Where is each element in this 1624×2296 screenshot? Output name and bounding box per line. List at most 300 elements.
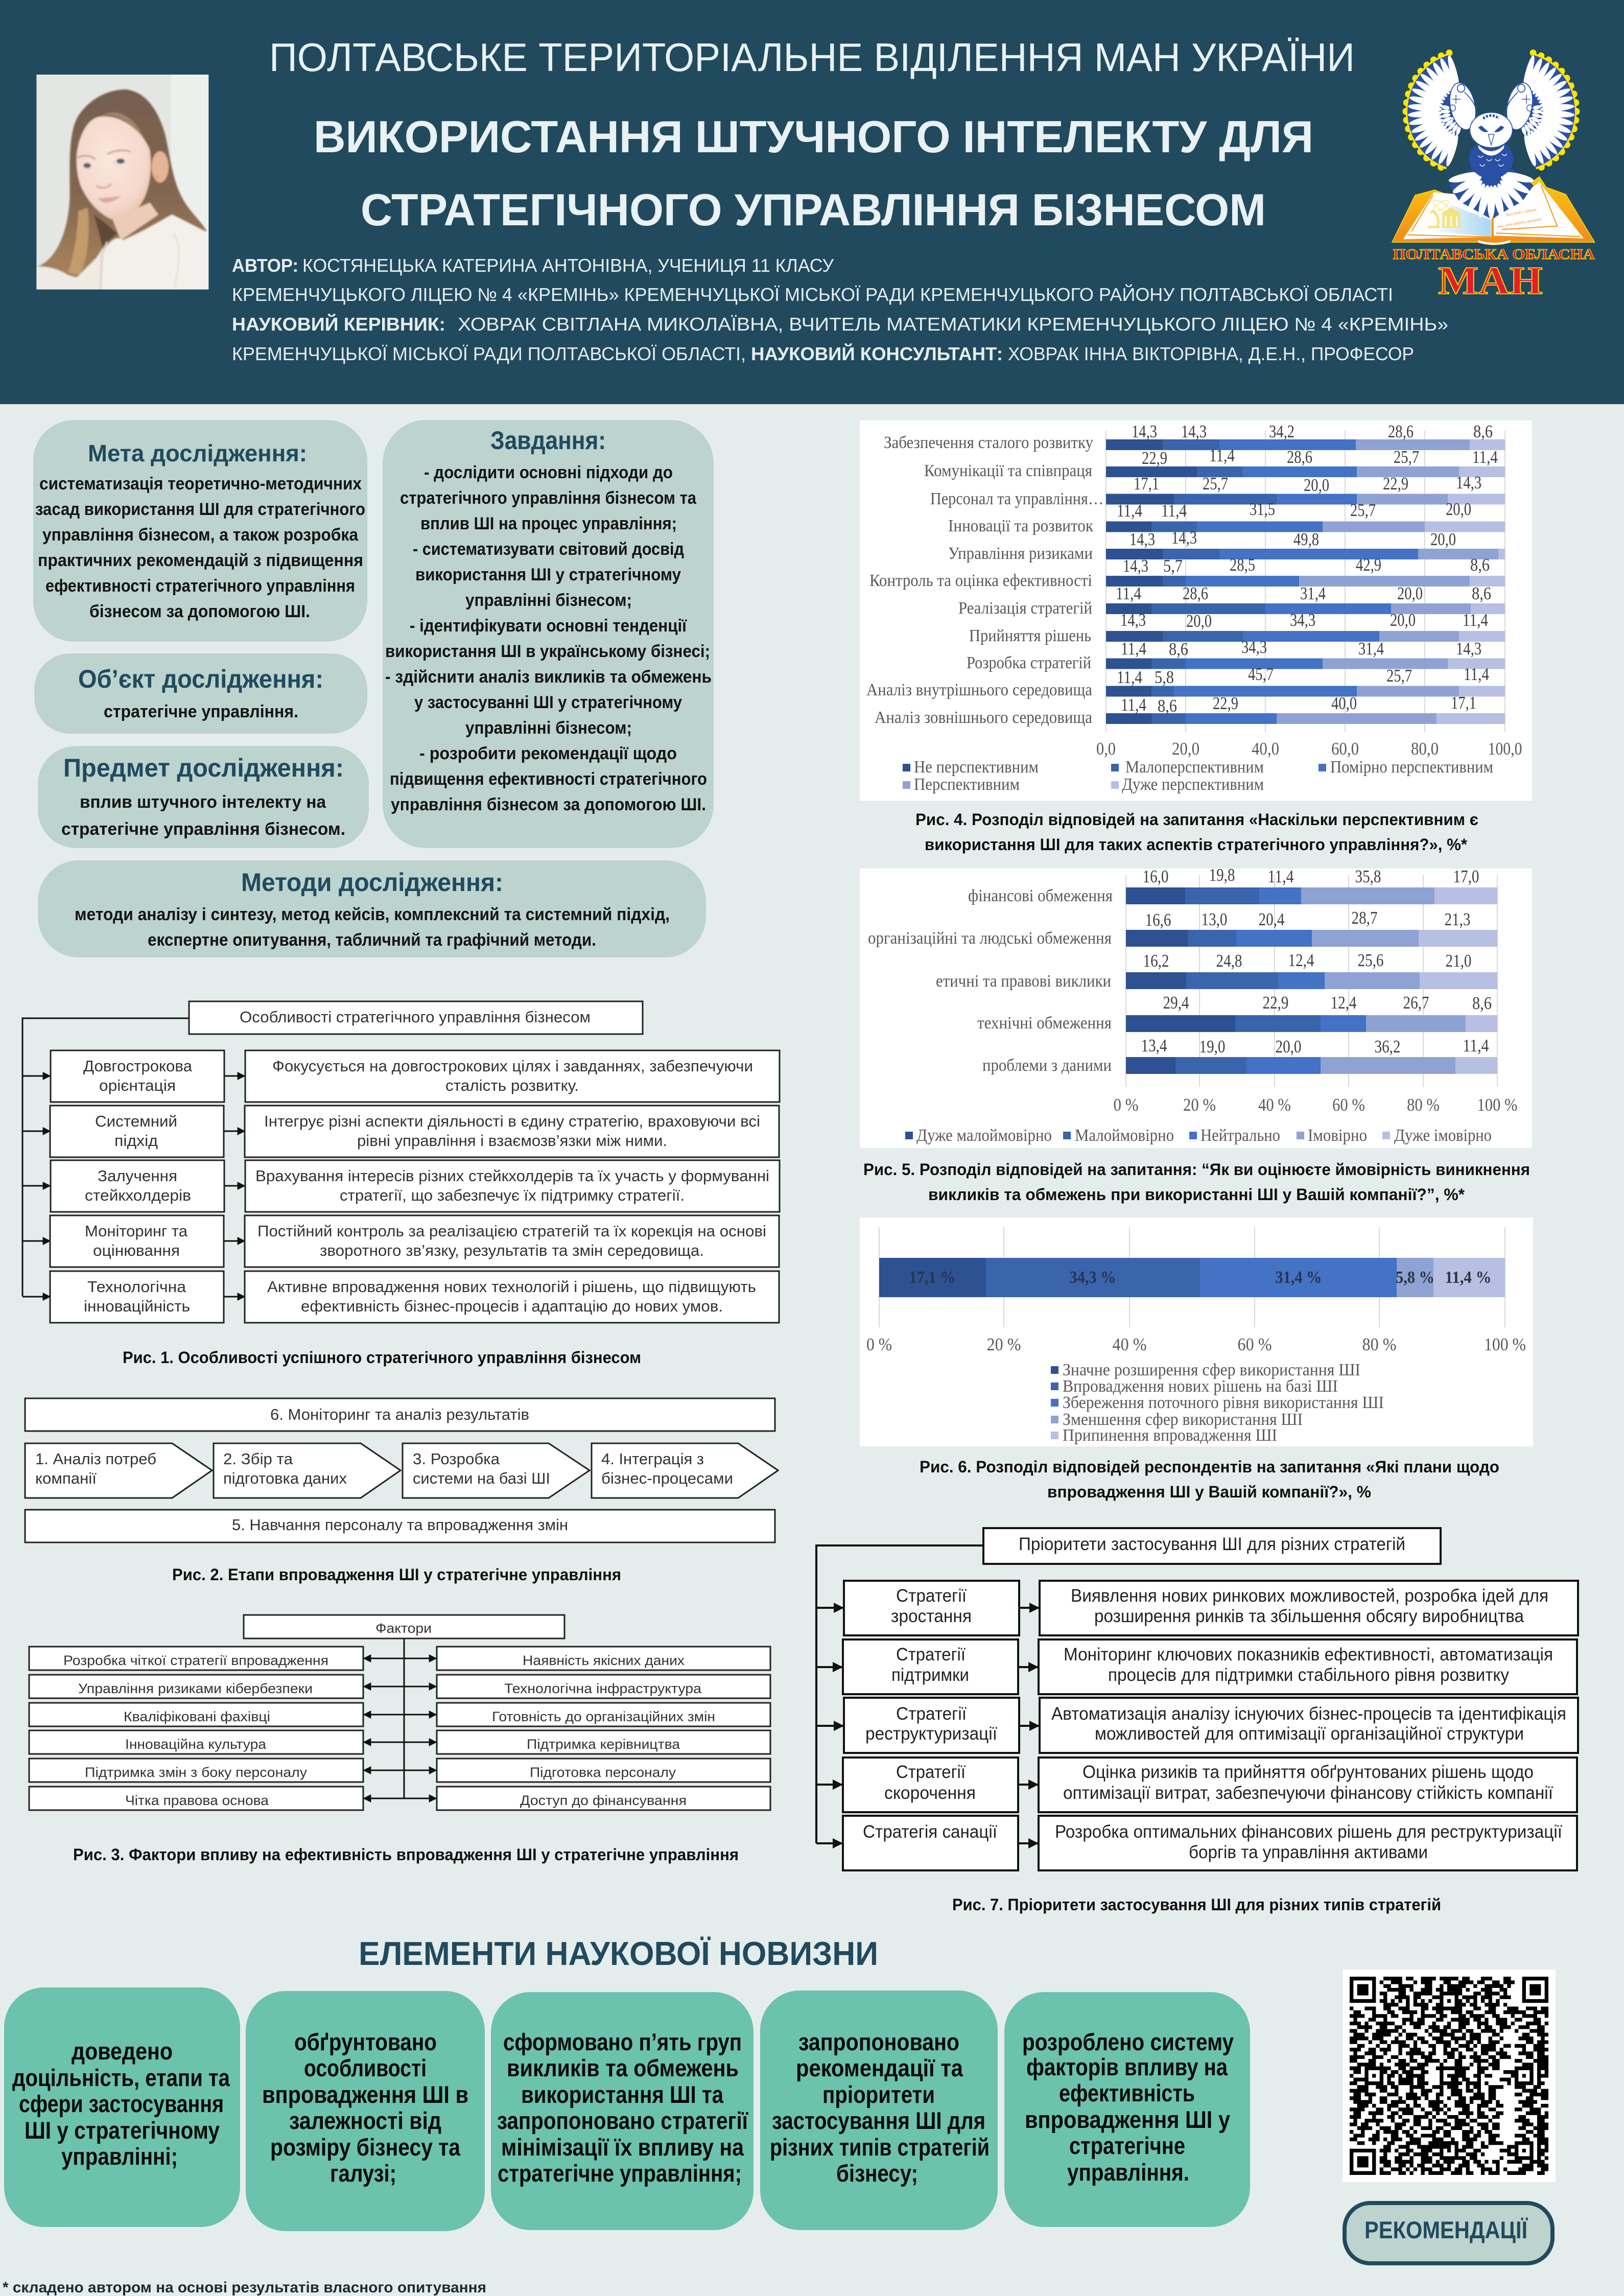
card: novelty 2: розміру бізнесу та [270,2134,461,2161]
panel: research subject [38,746,369,848]
author and supervisors text: КРЕМЕНЧУЦЬКОГО ЛІЦЕЮ № 4 «КРЕМІНЬ» КРЕМЕНЧУЦЬКОЇ МІСЬКОЇ РАДИ КРЕМЕНЧУЦЬКОГО РАЙОНУ ПОЛТАВСЬКОЇ ОБЛАСТІ [232,284,1393,305]
left factor boxes: Розробка чіткої стратегії впровадження [63,1653,328,1668]
value labels: 31,4 % [1275,1268,1322,1287]
text: aim: систематизація теоретично-методичних [39,474,362,494]
card: novelty 5: стратегічне [1069,2132,1185,2159]
stacked bars [1126,887,1497,1074]
value labels: 20,0 [1390,610,1416,630]
category labels [868,886,1113,1075]
caption: figure 4 [915,810,1478,854]
card: novelty 4 [760,1990,998,2230]
value labels: 26,7 [1403,993,1429,1013]
row: support strategies [843,1639,1577,1694]
category labels: Персонал та управління… [930,489,1103,508]
text: object: стратегічне управління. [104,702,298,721]
footnote: * складено автором на основі результатів власного опитування [3,2279,486,2296]
value labels: 34,2 [1269,421,1295,441]
left factor boxes: Інноваційна культура [125,1737,267,1752]
right factor boxes: Готовність до організаційних змін [492,1709,715,1724]
row: support strategies: процесів для підтримки стабільного рівня розвитку [1108,1665,1509,1685]
text: tasks list: - дослідити основні підходи до [424,463,673,482]
card: novelty 2 [246,1991,485,2231]
caption: figure 4: Рис. 4. Розподіл відповідей на запитання «Наскільки перспективним є [915,810,1478,829]
caption: figure 6: впровадження ШІ у Вашій компанії?», % [1047,1483,1371,1501]
card: novelty 4: запропоновано [798,2028,959,2055]
row: growth strategies: Виявлення нових ринкових можливостей, розробка ідей для [1071,1586,1548,1606]
caption: figure 6 [920,1458,1499,1501]
chart: figure 5 stacked bars [860,865,1532,1148]
value labels: 25,7 [1350,500,1376,520]
value labels [909,1268,1492,1287]
open book: хто світ робить кращим! [1496,216,1542,229]
value labels: 14,3 [1123,556,1148,576]
value labels: 42,9 [1356,555,1381,575]
row: support strategies: Моніторинг ключових показників ефективності, автоматизація [1064,1645,1553,1665]
legend [903,758,1493,794]
caption: figure 1: Рис. 1. Особливості успішного стратегічного управління бізнесом [123,1348,641,1367]
value labels: 17,1 [1451,693,1476,713]
category labels [866,433,1103,727]
box: diagram title: Пріоритети застосування ШІ для різних стратегій [1019,1534,1405,1554]
value labels: 11,4 [1209,446,1235,465]
poster title: СТРАТЕГІЧНОГО УПРАВЛІННЯ БІЗНЕСОМ [361,184,1266,235]
row: systems approach: підхід [114,1132,158,1150]
row: stakeholder engagement: Врахування інтересів різних стейкхолдерів та їх участь у формуванні [255,1167,769,1185]
panel: research methods [38,860,706,957]
value labels: 11,4 [1472,447,1498,467]
row: support strategies: Стратегії [896,1645,966,1665]
arrow: stage 1: компанії [35,1469,97,1487]
legend: Збереження поточного рівня використання ШІ [1063,1393,1384,1412]
author and supervisors text: КОСТЯНЕЦЬКА КАТЕРИНА АНТОНІВНА, УЧЕНИЦЯ 11 КЛАСУ [302,255,834,276]
box: diagram title: Особливості стратегічного управління бізнесом [240,1008,591,1026]
right factor boxes: Підтримка керівництва [527,1737,680,1752]
value labels: 14,3 [1181,421,1207,441]
author and supervisors text [232,255,1448,364]
left factor boxes: Підтримка змін з боку персоналу [85,1765,308,1780]
value labels: 19,8 [1209,865,1235,885]
caption: figure 2: Рис. 2. Етапи впровадження ШІ у стратегічне управління [172,1565,621,1584]
value labels: 14,3 [1129,529,1155,549]
row: restructuring strategies: Стратегії [896,1704,967,1724]
value labels: 11,4 [1116,583,1141,603]
panel: tasks [383,420,714,848]
value labels: 25,7 [1394,447,1419,467]
value labels: 21,3 [1445,909,1470,929]
value labels: 12,4 [1288,950,1314,970]
value labels: 17,0 [1453,866,1479,886]
value labels: 20,0 [1397,583,1423,603]
row: monitoring and evaluation: Моніторинг та [85,1222,188,1240]
button: recommendations: РЕКОМЕНДАЦІЇ [1364,2216,1528,2243]
value labels [1141,865,1492,1057]
heading: methods: Методи дослідження: [241,868,503,897]
legend: Дуже малоймовірно [916,1126,1052,1145]
legend: Перспективним [914,775,1020,794]
legend: Імовірно [1308,1126,1367,1145]
card: novelty 4: рекомендації та [796,2054,963,2081]
row: technological innovation: Технологічна [87,1278,186,1296]
value labels: 12,4 [1330,993,1357,1013]
x axis labels: 60,0 [1331,739,1359,759]
value labels: 11,4 % [1445,1268,1492,1287]
value labels: 22,9 [1142,448,1167,468]
value labels: 16,0 [1142,866,1169,886]
value labels: 11,4 [1464,664,1489,684]
value labels: 13,4 [1141,1036,1167,1056]
box: stage 6 [25,1398,775,1431]
owl tail [1448,165,1535,219]
text: tasks list: управлінні бізнесом; [465,591,632,610]
row: long-term orientation: сталість розвитку. [445,1076,579,1094]
value labels: 25,6 [1358,950,1383,970]
logo wording: ПОЛТАВСЬКА ОБЛАСНА: ПОЛТАВСЬКА ОБЛАСНА [1393,247,1595,263]
caption: figure 3: Рис. 3. Фактори впливу на ефективність впровадження ШІ у стратегічне управління [73,1845,739,1864]
value labels: 11,4 [1117,667,1142,687]
x axis labels: 0,0 [1096,739,1116,759]
x axis labels: 80 % [1362,1334,1397,1354]
x axis labels [1096,739,1522,759]
chart: figure 6 single stacked bar [860,1217,1533,1446]
row: technological innovation: Активне впровадження нових технологій і рішень, що підвищують [267,1278,756,1296]
value labels: 19,0 [1199,1037,1225,1057]
row: systems approach: Інтегрує різні аспекти діяльності в єдину стратегію, враховуючи всі [264,1112,760,1130]
category labels: Розробка стратегій [967,653,1091,672]
photo: author portrait [36,75,208,290]
card: novelty 1: сфери застосування [19,2090,224,2117]
row: restructuring strategies: Автоматизація аналізу існуючих бізнес-процесів та ідентифікація [1051,1704,1566,1724]
x axis labels: 40 % [1258,1095,1291,1115]
x axis labels: 20 % [1183,1095,1216,1115]
diagram: figure 7 AI priorities by strategy [816,1528,1578,1870]
category labels: Прийняття рішень [969,626,1091,645]
arrow: stage 4: 4. Інтеграція з [601,1450,704,1468]
row: technological innovation [50,1271,779,1323]
connector lines and arrows [22,1018,245,1297]
row: monitoring and evaluation: зворотного зв’язку, результатів та змін середовища. [320,1241,704,1259]
header band [0,0,1624,404]
card: novelty 5: впровадження ШІ у [1025,2106,1230,2133]
value labels: 34,3 [1241,637,1267,657]
text: tasks list [385,463,712,814]
card: novelty 3: сформовано п’ять груп [503,2028,742,2055]
category labels: фінансові обмеження [968,886,1113,905]
value labels: 20,0 [1186,611,1212,631]
category labels: Реалізація стратегій [958,599,1092,618]
card: novelty 3 [491,1992,754,2230]
card: novelty 1: доведено [72,2037,173,2065]
row: systems approach: Системний [95,1112,177,1130]
legend: Припинення впровадження ШІ [1063,1426,1277,1445]
value labels: 24,8 [1216,951,1242,971]
value labels: 14,3 [1171,528,1197,548]
owl wing, right [1503,53,1576,169]
value labels: 16,6 [1145,910,1171,930]
value labels: 20,0 [1275,1037,1302,1057]
value labels: 49,8 [1293,529,1319,549]
x axis labels: 20,0 [1172,739,1199,759]
left factor boxes [29,1647,363,1810]
right factor boxes: Технологічна інфраструктура [504,1681,702,1696]
category labels: Комунікації та співпраця [924,461,1092,480]
arrow: stage 4 [592,1443,778,1498]
legend: Зменшення сфер використання ШІ [1063,1410,1303,1429]
row: long-term orientation [51,1050,780,1102]
text: tasks list: використання ШІ у стратегічному [415,565,681,584]
text: tasks list: використання ШІ в українському бізнесі; [385,642,710,661]
row: reduction strategies [843,1758,1577,1812]
legend: Дуже перспективним [1122,775,1264,794]
value labels: 25,7 [1386,666,1412,686]
card: novelty 3: мінімізації їх впливу на [501,2134,744,2161]
arrow: stage 1: 1. Аналіз потреб [35,1450,156,1468]
x axis labels [1114,1095,1517,1115]
value labels: 5,7 [1163,556,1183,576]
value labels: 20,4 [1259,909,1284,929]
x axis labels: 80,0 [1411,739,1439,759]
card: novelty 2: особливості [304,2054,427,2081]
row: monitoring and evaluation: оцінювання [93,1241,180,1259]
legend [905,1126,1492,1145]
row: monitoring and evaluation [50,1215,779,1267]
box: stage 6: 6. Моніторинг та аналіз результатів [270,1405,529,1423]
text: tasks list: - розробити рекомендації щодо [419,744,677,763]
value labels: 28,6 [1388,421,1414,441]
card: novelty 1 [4,1987,240,2227]
value labels: 21,0 [1446,951,1471,971]
row: stakeholder engagement: стратегії, що забезпечує їх підтримку стратегії. [340,1186,685,1204]
category labels: Аналіз зовнішнього середовища [875,708,1092,727]
row: stakeholder engagement: Залучення [98,1167,177,1185]
value labels: 34,3 % [1070,1268,1116,1287]
value labels: 11,4 [1117,501,1142,521]
value labels: 16,2 [1143,951,1169,971]
card: novelty 1: управлінні; [61,2143,178,2170]
x axis labels: 40,0 [1252,739,1279,759]
card: novelty 2: галузі; [330,2160,396,2187]
row: technological innovation: ефективність бізнес-процесів і адаптацію до нових умов. [301,1297,723,1315]
value labels: 8,6 [1473,421,1493,441]
caption: figure 5: Рис. 5. Розподіл відповідей на запитання: “Як ви оцінюєте ймовірність виникнення [863,1160,1530,1179]
row: long-term orientation: орієнтація [99,1076,176,1094]
arrow: stage 3 [403,1443,590,1498]
row: reduction strategies: скорочення [884,1783,976,1803]
heading: subject: Предмет дослідження: [63,754,344,782]
heading: elements of scientific novelty: ЕЛЕМЕНТИ НАУКОВОЇ НОВИЗНИ [359,1935,878,1972]
card: novelty 4: застосування ШІ для [772,2107,985,2134]
row: systems approach [50,1106,779,1157]
row: growth strategies [844,1581,1578,1635]
value labels: 20,0 [1304,475,1329,495]
QR code [1343,1970,1556,2182]
author and supervisors text: НАУКОВИЙ КОНСУЛЬТАНТ: [751,343,1003,364]
legend: Нейтрально [1201,1126,1280,1145]
poster title: ВИКОРИСТАННЯ ШТУЧНОГО ІНТЕЛЕКТУ ДЛЯ [314,111,1313,162]
value labels: 8,6 [1158,696,1177,716]
card: novelty 5: факторів впливу на [1026,2053,1228,2080]
left factor boxes: Чітка правова основа [125,1793,269,1808]
legend [1051,1361,1384,1445]
row: stakeholder engagement: стейкхолдерів [85,1186,191,1204]
chart: figure 4 stacked bars [860,420,1532,801]
text: aim [35,474,365,621]
caption: figure 6: Рис. 6. Розподіл відповідей респондентів на запитання «Які плани щодо [920,1458,1499,1476]
value labels: 22,9 [1383,474,1408,494]
arrow: stage 1 [25,1443,212,1498]
value labels: 8,6 [1472,993,1492,1013]
stacked bar [879,1258,1505,1297]
card: novelty 5: розроблено систему [1022,2028,1234,2055]
value labels: 31,5 [1250,499,1275,519]
category labels: етичні та правові виклики [936,972,1111,991]
row: rehabilitation strategy: Стратегія санації [863,1822,997,1842]
heading: aim: Мета дослідження: [88,440,307,466]
open book [1392,177,1595,245]
value labels: 31,4 [1300,583,1326,603]
card: novelty 2: залежності від [289,2107,441,2134]
x axis labels [866,1334,1526,1354]
gridlines [1106,431,1505,732]
x axis labels: 100 % [1484,1334,1526,1354]
value labels: 40,0 [1331,693,1357,713]
text: aim: практичних рекомендацій з підвищення [38,551,363,570]
arrow: stage 2 [214,1443,401,1498]
value labels: 45,7 [1248,664,1274,684]
right factor boxes: Наявність якісних даних [523,1653,685,1668]
value labels: 20,0 [1430,529,1456,549]
category labels: проблеми з даними [982,1056,1112,1075]
text: tasks list: вплив ШІ на процес управління; [420,514,677,533]
panel: research aim [33,420,367,642]
x axis labels: 100 % [1477,1095,1517,1115]
value labels: 11,4 [1161,501,1187,521]
card: novelty 1: ШІ у стратегічному [25,2117,220,2144]
diagram: figure 1 features of strategic management [22,1001,780,1323]
row: restructuring strategies [844,1698,1578,1753]
row: monitoring and evaluation: Постійний контроль за реалізацією стратегій та їх корекція на основі [257,1222,766,1240]
arrow: stage 4: бізнес-процесами [601,1469,733,1487]
text: subject: вплив штучного інтелекту на [80,792,326,812]
arrow: stage 2: 2. Збір та [223,1450,293,1468]
x axis labels: 80 % [1407,1095,1440,1115]
text: subject: стратегічне управління бізнесом. [61,819,345,839]
text: aim: засад використання ШІ для стратегічного [35,500,365,519]
value labels: 35,8 [1355,866,1381,886]
legend: Малоперспективним [1125,758,1264,777]
panel: research object [34,653,367,734]
right factor boxes: Доступ до фінансування [520,1793,687,1808]
value labels: 20,0 [1446,499,1471,519]
x axis labels: 60 % [1332,1095,1365,1115]
legend: Малоймовірно [1075,1126,1174,1145]
category labels: технічні обмеження [977,1014,1112,1033]
caption: figure 5: викликів та обмежень при використанні ШІ у Вашій компанії?”, %* [928,1185,1465,1204]
value labels: 22,9 [1263,993,1288,1013]
legend: Не перспективним [914,758,1039,777]
value labels: 28,6 [1183,583,1208,603]
caption: figure 7: Рис. 7. Пріоритети застосування ШІ для різних типів стратегій [952,1895,1441,1914]
heading: tasks: Завдання: [490,426,606,455]
caption: figure 5 [863,1160,1530,1204]
caption: figure 4: використання ШІ для таких аспектів стратегічного управління?», %* [925,835,1468,854]
card: novelty 2: впровадження ШІ в [262,2081,468,2108]
value labels: 8,6 [1470,555,1490,575]
category labels: Забезпечення сталого розвитку [884,433,1093,452]
card: novelty 3: стратегічне управління; [498,2160,742,2187]
author and supervisors text: ХОВРАК СВІТЛАНА МИКОЛАЇВНА, ВЧИТЕЛЬ МАТЕМАТИКИ КРЕМЕНЧУЦЬКОГО ЛІЦЕЮ № 4 «КРЕМІНЬ» [458,314,1448,335]
text: methods: експертне опитування, табличний та графічний методи. [148,930,596,950]
value labels: 11,4 [1463,610,1488,630]
box: stage 5: 5. Навчання персоналу та впровадження змін [232,1516,568,1534]
value labels: 5,8 [1155,667,1174,687]
arrow: stage 2: підготовка даних [223,1469,347,1487]
row: systems approach: рівні управління і взаємозв’язки між ними. [357,1132,667,1150]
category labels: Управління ризиками [948,544,1093,563]
connector lines and arrows [816,1545,1039,1843]
box: stage 5 [25,1510,775,1542]
value labels: 11,4 [1463,1036,1489,1056]
box: factors title: Фактори [375,1621,432,1636]
author and supervisors text: АВТОР: [232,255,298,276]
button: recommendations [1345,2203,1552,2263]
value labels: 28,5 [1230,555,1255,575]
value labels: 36,2 [1374,1037,1401,1057]
text: subject [61,792,345,839]
owl body and head [1469,112,1513,178]
card: novelty 3: використання ШІ та [521,2081,724,2108]
poster title [314,111,1313,235]
text: methods: методи аналізу і синтезу, метод кейсів, комплексний та системний підхід, [75,905,670,924]
text: tasks list: - систематизувати світовий досвід [413,540,684,559]
row: technological innovation: інноваційність [84,1297,190,1315]
card: novelty 4: бізнесу; [836,2160,918,2187]
arrow: stage 3: 3. Розробка [413,1450,500,1468]
value labels: 17,1 [1134,474,1159,494]
value labels: 31,4 [1358,639,1384,659]
text: aim: ефективності стратегічного управління [45,576,355,596]
text: tasks list: управління бізнесом за допомогою ШІ. [391,795,706,814]
value labels: 28,6 [1287,447,1312,467]
text: tasks list: підвищення ефективності стратегічного [390,769,707,789]
value labels: 8,6 [1472,583,1491,603]
row: reduction strategies: Оцінка ризиків та прийняття обґрунтованих рішень щодо [1082,1762,1534,1782]
row: restructuring strategies: реструктуризації [865,1724,997,1744]
card: novelty 4: пріоритети [822,2081,935,2108]
author and supervisors text: НАУКОВИЙ КЕРІВНИК: [232,313,445,335]
text: tasks list: - ідентифікувати основні тенденції [410,616,687,636]
diagram: figure 3 factors [29,1615,770,1810]
institution heading: ПОЛТАВСЬКЕ ТЕРИТОРІАЛЬНЕ ВІДІЛЕННЯ МАН УКРАЇНИ [269,35,1355,80]
text: tasks list: управлінні бізнесом; [465,718,632,738]
connector with double arrows [364,1638,436,1798]
value labels [1116,421,1498,716]
x axis labels: 0 % [866,1334,892,1354]
gridlines [1126,875,1497,1087]
stacked bars [1106,439,1505,724]
row: stakeholder engagement [51,1160,780,1212]
category labels: Аналіз внутрішнього середовища [866,681,1092,699]
row: long-term orientation: Довгострокова [83,1057,193,1075]
row: reduction strategies: оптимізації витрат, забезпечуючи фінансову стійкість компанії [1063,1783,1553,1803]
box: diagram title [983,1528,1441,1564]
box: diagram title [189,1001,643,1034]
logo wording: МАН: МАН [1438,259,1543,302]
row: restructuring strategies: можливостей для оптимізації організаційної структури [1095,1724,1524,1744]
legend: Помірно перспективним [1330,758,1493,777]
row: rehabilitation strategy: Розробка оптимальних фінансових рішень для реструктуризації [1055,1822,1562,1842]
card: novelty 5: управління. [1067,2159,1189,2186]
author and supervisors text: ХОВРАК ІННА ВІКТОРІВНА, Д.Е.Н., ПРОФЕСОР [1008,343,1414,364]
